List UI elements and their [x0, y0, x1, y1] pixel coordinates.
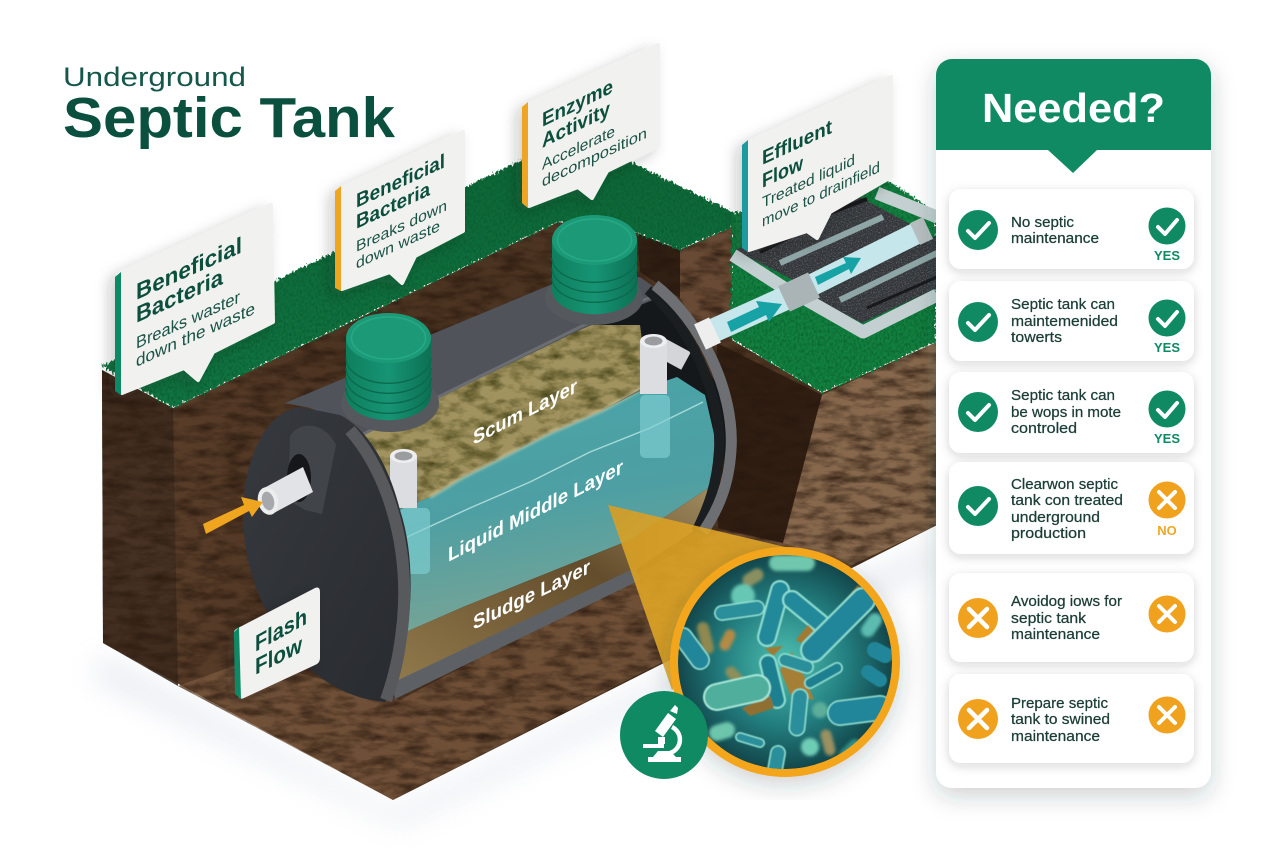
callout: flash flow — [234, 588, 320, 699]
bacteria scene — [678, 555, 892, 770]
row 2: Septic tank can — [1011, 297, 1115, 313]
callout: effluent flow: move to drainfield — [762, 158, 880, 231]
sludge layer — [396, 487, 710, 685]
row 3 — [949, 372, 1194, 453]
inlet pipe — [255, 467, 313, 517]
tank end cap — [243, 407, 411, 702]
row 3: Septic tank can — [1011, 388, 1115, 404]
lid collar left — [341, 374, 439, 432]
row 3: YES — [1154, 431, 1180, 446]
callout: enzyme activity: Accelerate — [542, 122, 615, 174]
panel header — [936, 59, 1211, 173]
layer label: scum: Scum Layer — [473, 374, 577, 450]
title — [63, 62, 395, 150]
tank dark interior — [358, 290, 727, 695]
row 5: Avoidog iows for — [1011, 594, 1122, 610]
row 6: maintenance — [1011, 729, 1100, 745]
callout: enzyme activity: Activity — [542, 98, 610, 153]
callout: effluent flow: Treated liquid — [762, 151, 855, 212]
callout: beneficial bacteria 1: down the waste — [136, 298, 255, 371]
outlet collar — [700, 330, 715, 337]
ground shadow — [95, 545, 930, 825]
outlet baffle pipe — [640, 334, 686, 394]
green lid right — [552, 215, 637, 314]
row 3: controled — [1011, 421, 1077, 437]
row 4: Clearwon septic — [1011, 477, 1118, 493]
callout: beneficial bacteria 1: Bacteria — [136, 264, 224, 329]
row 2: towerts — [1011, 330, 1062, 346]
inlet hole — [287, 454, 311, 502]
microscope badge — [620, 691, 708, 779]
callout: beneficial bacteria 1: Breaks waster — [136, 287, 240, 353]
callout: flash flow: Flow — [255, 632, 302, 681]
row 2: YES — [1154, 340, 1180, 355]
panel heading: Needed? — [982, 85, 1165, 131]
row 5 — [949, 573, 1194, 662]
lid collar right — [545, 271, 643, 325]
row 3: be wops in mote — [1011, 405, 1121, 421]
scum bright edge — [430, 385, 648, 497]
distribution pipe cap — [915, 228, 928, 234]
callout: beneficial bacteria 2: down waste — [356, 217, 440, 273]
inlet baffle pipe — [390, 449, 417, 508]
callout: enzyme activity — [522, 45, 658, 208]
row 1 — [949, 189, 1194, 269]
callout: beneficial bacteria 1: Beneficial — [136, 232, 242, 306]
title line 2: Septic Tank — [63, 86, 395, 150]
flow arrow 2 — [815, 257, 861, 285]
callout: effluent flow: Effluent — [762, 116, 832, 170]
frame pipes — [733, 193, 937, 332]
callout: beneficial bacteria 2: Bacteria — [356, 178, 430, 234]
row 4: production — [1011, 526, 1086, 542]
right rim — [655, 285, 731, 532]
soil block — [102, 222, 937, 800]
row 4: underground — [1011, 510, 1100, 526]
tank top front lip — [357, 292, 663, 437]
row 1: maintenance — [1011, 231, 1099, 247]
pipe coupling — [784, 285, 814, 299]
panel: needed? — [936, 59, 1211, 788]
callout: beneficial bacteria 2: Beneficial — [356, 150, 445, 213]
right rim dark — [648, 290, 719, 532]
layer label: liquid: Liquid Middle Layer — [448, 455, 623, 567]
main distribution pipe — [810, 230, 923, 286]
inlet boss — [288, 426, 336, 514]
scum layer — [356, 325, 648, 513]
soil: lower slab — [178, 530, 852, 800]
microscope icon — [643, 705, 681, 762]
row 1: No septic — [1011, 215, 1074, 231]
soil: notch inner face — [637, 233, 680, 298]
soil: drainfield dark face — [717, 343, 822, 543]
row 5: maintenance — [1011, 627, 1100, 643]
callout: beneficial bacteria 2: Breaks down — [356, 197, 447, 256]
row 1: YES — [1154, 248, 1180, 263]
microscopic bacteria view — [670, 547, 900, 777]
panel body — [936, 59, 1211, 788]
row 4: tank con treated — [1011, 493, 1123, 509]
tank top — [285, 277, 665, 437]
row 2: maintemenided — [1011, 314, 1118, 330]
tank bottom rim — [392, 568, 640, 699]
row 4: NO — [1157, 523, 1177, 538]
row 2 — [949, 281, 1194, 361]
soil: drainfield lit face — [783, 342, 937, 565]
inlet baffle submerged — [400, 508, 430, 574]
water surface line — [407, 402, 703, 537]
callout: effluent flow — [742, 77, 891, 252]
outlet baffle submerged — [640, 395, 670, 458]
magnifier ring — [670, 547, 900, 777]
magnifier cone — [608, 505, 785, 690]
green lid left — [346, 313, 431, 420]
callout: beneficial bacteria 2 — [335, 132, 463, 291]
row 6: tank to swined — [1011, 712, 1110, 728]
flow arrow 1 — [727, 301, 782, 332]
gravel bed back — [735, 197, 912, 281]
soil: right chunk — [680, 227, 732, 330]
inflow arrow — [203, 497, 263, 534]
callout: enzyme activity: decomposition — [542, 124, 647, 191]
row 6: Prepare septic — [1011, 696, 1108, 712]
drainfield — [708, 193, 937, 333]
soil: left face — [102, 370, 178, 686]
callout: effluent flow: Flow — [762, 152, 804, 193]
drainfield grass — [730, 180, 936, 393]
layer label: sludge: Sludge Layer — [473, 556, 590, 635]
row 5: septic tank — [1011, 611, 1087, 627]
end cap rim — [350, 430, 404, 700]
outlet pipe — [708, 297, 788, 333]
callout: enzyme activity: Enzyme — [542, 75, 613, 132]
callout: beneficial bacteria 1 — [115, 205, 273, 395]
callout: flash flow: Flash — [255, 604, 307, 658]
row 4 — [949, 462, 1194, 554]
row 6 — [949, 674, 1194, 763]
grass top surface — [102, 134, 733, 408]
gravel bed front — [813, 235, 937, 323]
title line 1: Underground — [63, 62, 246, 92]
liquid middle layer — [390, 377, 717, 632]
septic tank — [243, 215, 731, 702]
